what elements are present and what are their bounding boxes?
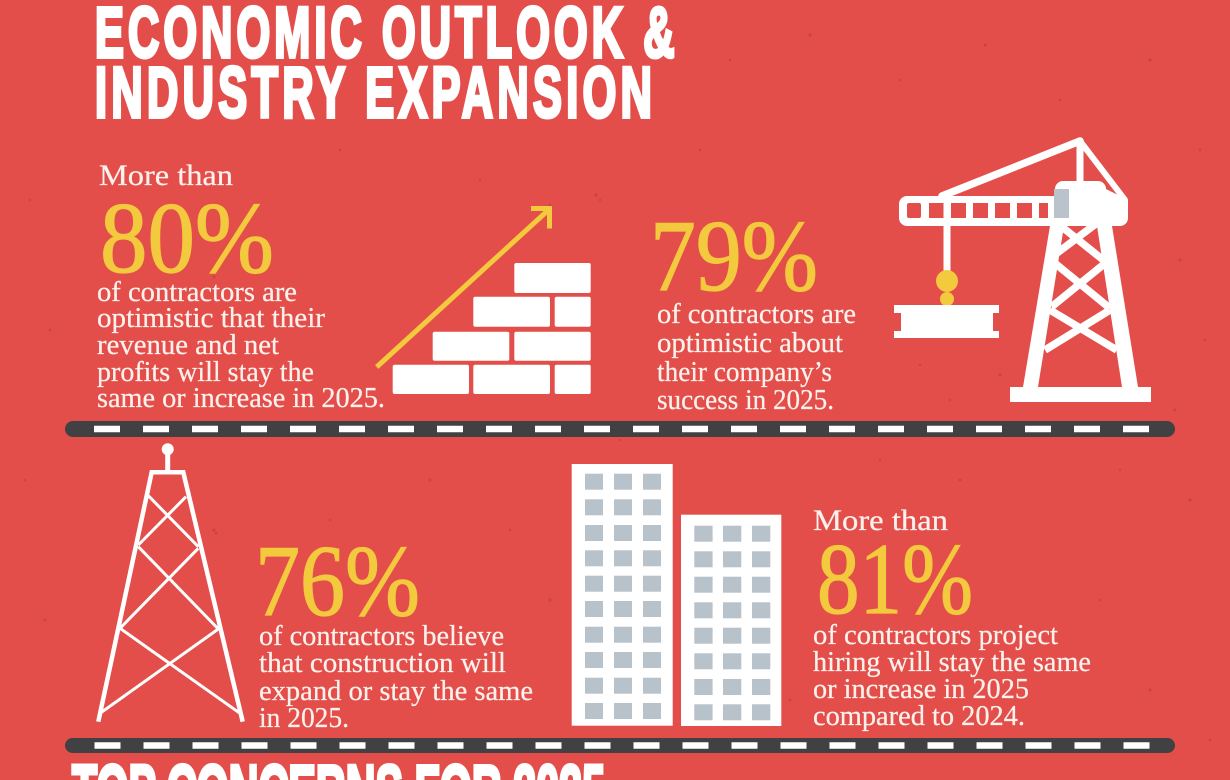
road divider: lower [65, 738, 1175, 753]
icon: two office buildings [572, 464, 781, 726]
stat: 79% of contractors optimistic about company success: their company’s [657, 357, 832, 388]
stat: 80% of contractors optimistic about revenue: 80% [100, 182, 274, 295]
icon: lattice tower [98, 443, 243, 722]
stat: 80% of contractors optimistic about revenue: optimistic that their [97, 303, 326, 334]
icon: brick staircase with rising arrow [377, 208, 591, 394]
stat: 80% of contractors optimistic about revenue: More than [99, 159, 233, 192]
road divider: upper [65, 421, 1175, 437]
stat: 76% of contractors believe construction will expand: of contractors believe [259, 621, 504, 652]
icon: tower crane lifting a steel beam [894, 141, 1151, 402]
stat: 79% of contractors optimistic about company success: optimistic about [657, 328, 843, 359]
stat: 76% of contractors believe construction will expand: 76% [255, 525, 420, 638]
stat: 76% of contractors believe construction will expand [255, 525, 533, 734]
title: Economic Outlook & Industry Expansion [95, 0, 674, 133]
stat: 81% of contractors project hiring will hold or grow [813, 504, 1091, 732]
stat: 79% of contractors optimistic about company success: 79% [650, 200, 818, 313]
stat: 76% of contractors believe construction will expand: that construction will [259, 648, 506, 679]
stat: 81% of contractors project hiring will hold or grow: of contractors project [813, 620, 1058, 651]
stat: 80% of contractors optimistic about revenue: same or increase in 2025. [97, 383, 385, 414]
stat: 79% of contractors optimistic about company success: success in 2025. [657, 385, 834, 416]
stat: 81% of contractors project hiring will hold or grow: More than [813, 504, 948, 537]
stat: 76% of contractors believe construction will expand: in 2025. [259, 703, 349, 734]
stat: 81% of contractors project hiring will hold or grow: 81% [817, 523, 973, 636]
stat: 80% of contractors optimistic about revenue [97, 159, 385, 414]
stat: 79% of contractors optimistic about company success: of contractors are [657, 299, 856, 330]
stat: 76% of contractors believe construction will expand: expand or stay the same [259, 676, 533, 707]
stat: 81% of contractors project hiring will hold or grow: or increase in 2025 [813, 674, 1029, 705]
stat: 81% of contractors project hiring will hold or grow: compared to 2024. [813, 701, 1025, 732]
stat: 81% of contractors project hiring will hold or grow: hiring will stay the same [813, 647, 1091, 678]
stat: 80% of contractors optimistic about revenue: of contractors are [97, 277, 297, 308]
stat: 80% of contractors optimistic about revenue: revenue and net [97, 330, 279, 361]
stat: 79% of contractors optimistic about company success [650, 200, 856, 416]
title: Economic Outlook & Industry Expansion: INDUSTRY EXPANSION [95, 54, 652, 133]
stat: 80% of contractors optimistic about revenue: profits will stay the [97, 357, 314, 388]
